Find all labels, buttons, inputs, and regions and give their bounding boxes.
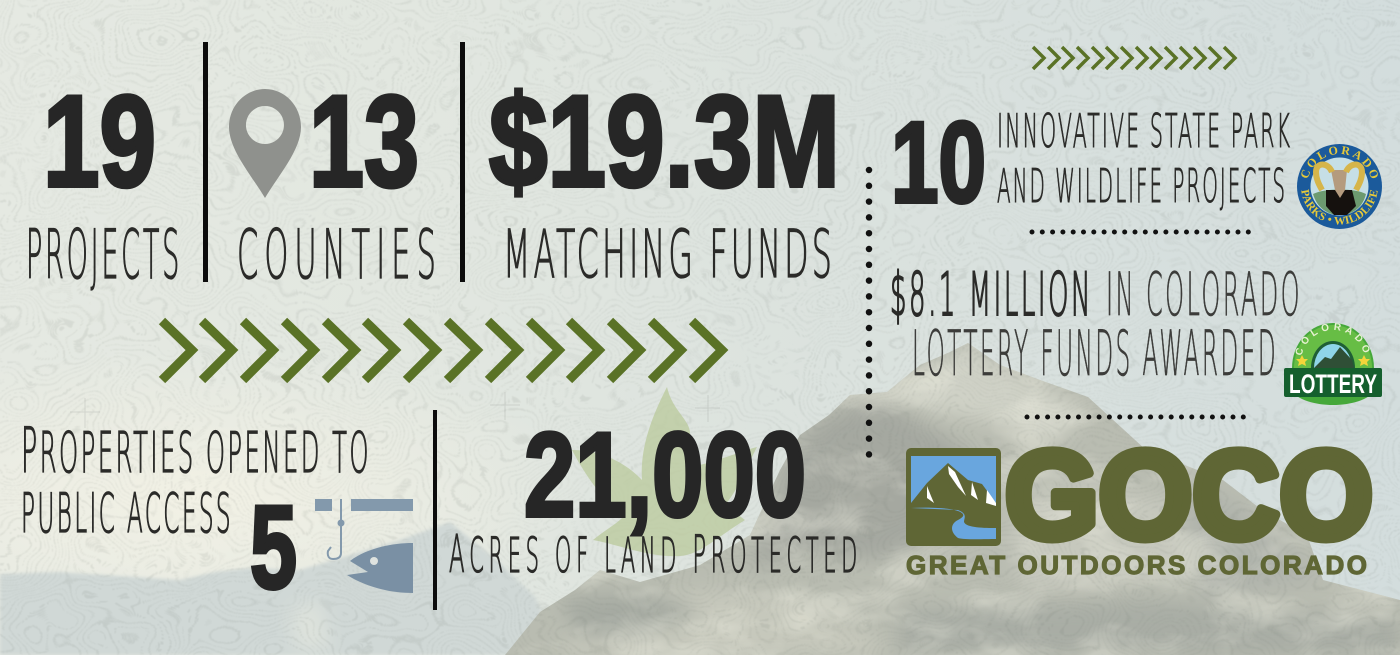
infographic canvas: COUNTIES <box>237 216 442 295</box>
horizontal dotted separator <box>1032 230 1250 234</box>
number 10: 10 <box>891 99 986 227</box>
icon: Colorado Parks and Wildlife seal: PARKS • WILDLIFE <box>1301 189 1378 225</box>
logo mountain square <box>906 448 1001 546</box>
icon: Colorado Parks and Wildlife seal: COLORADO <box>1301 146 1378 178</box>
icon: Colorado Lottery logo <box>1284 323 1382 405</box>
arrows: large green chevrons <box>162 321 722 380</box>
logo: GOCO <box>906 427 1373 580</box>
stat: 13 counties <box>229 68 442 295</box>
stat: 19 projects <box>26 68 182 295</box>
icon: Colorado Parks and Wildlife seal <box>1297 144 1382 229</box>
stat: lottery funds: $8.1 MILLION <box>890 260 1093 330</box>
divider line <box>433 410 437 610</box>
faint survey cross marks <box>70 392 720 428</box>
number 21,000: 21,000 <box>524 408 806 542</box>
vertical dotted separator <box>866 170 872 460</box>
number 19.3M: $19.3M <box>489 68 840 214</box>
icon: Colorado Lottery logo: COLORADO <box>1296 323 1370 355</box>
stat: properties opened to public access: PUBLIC ACCESS <box>21 482 233 545</box>
number 13: 13 <box>309 68 419 214</box>
divider line <box>203 42 208 282</box>
icon: green leaf <box>572 387 757 556</box>
stat: properties opened to public access: PROPERTIES OPENED TO <box>21 414 371 487</box>
icon: map pin <box>229 89 301 198</box>
icon: fish and hook <box>315 499 413 593</box>
infographic canvas: PROJECTS <box>26 216 182 295</box>
horizontal dotted separator <box>1027 414 1245 420</box>
divider line <box>460 42 465 282</box>
stat: matching funds <box>489 68 840 293</box>
stat: 21,000 acres protected <box>449 408 862 585</box>
logo tagline: GREAT OUTDOORS COLORADO <box>906 550 1367 580</box>
stat: properties opened to public access <box>21 414 413 614</box>
number 5: 5 <box>250 482 297 614</box>
stat: 10 state park and wildlife projects <box>891 99 1292 227</box>
number 19: 19 <box>43 68 156 214</box>
arrows: small green chevrons <box>1033 47 1235 69</box>
label acres of land protected: ACRES OF LAND PROTECTED <box>449 525 862 585</box>
infographic canvas: MATCHING FUNDS <box>503 216 835 293</box>
stat: lottery funds <box>890 260 1302 390</box>
logo wordmark GOCO: GOCO <box>1005 427 1373 565</box>
